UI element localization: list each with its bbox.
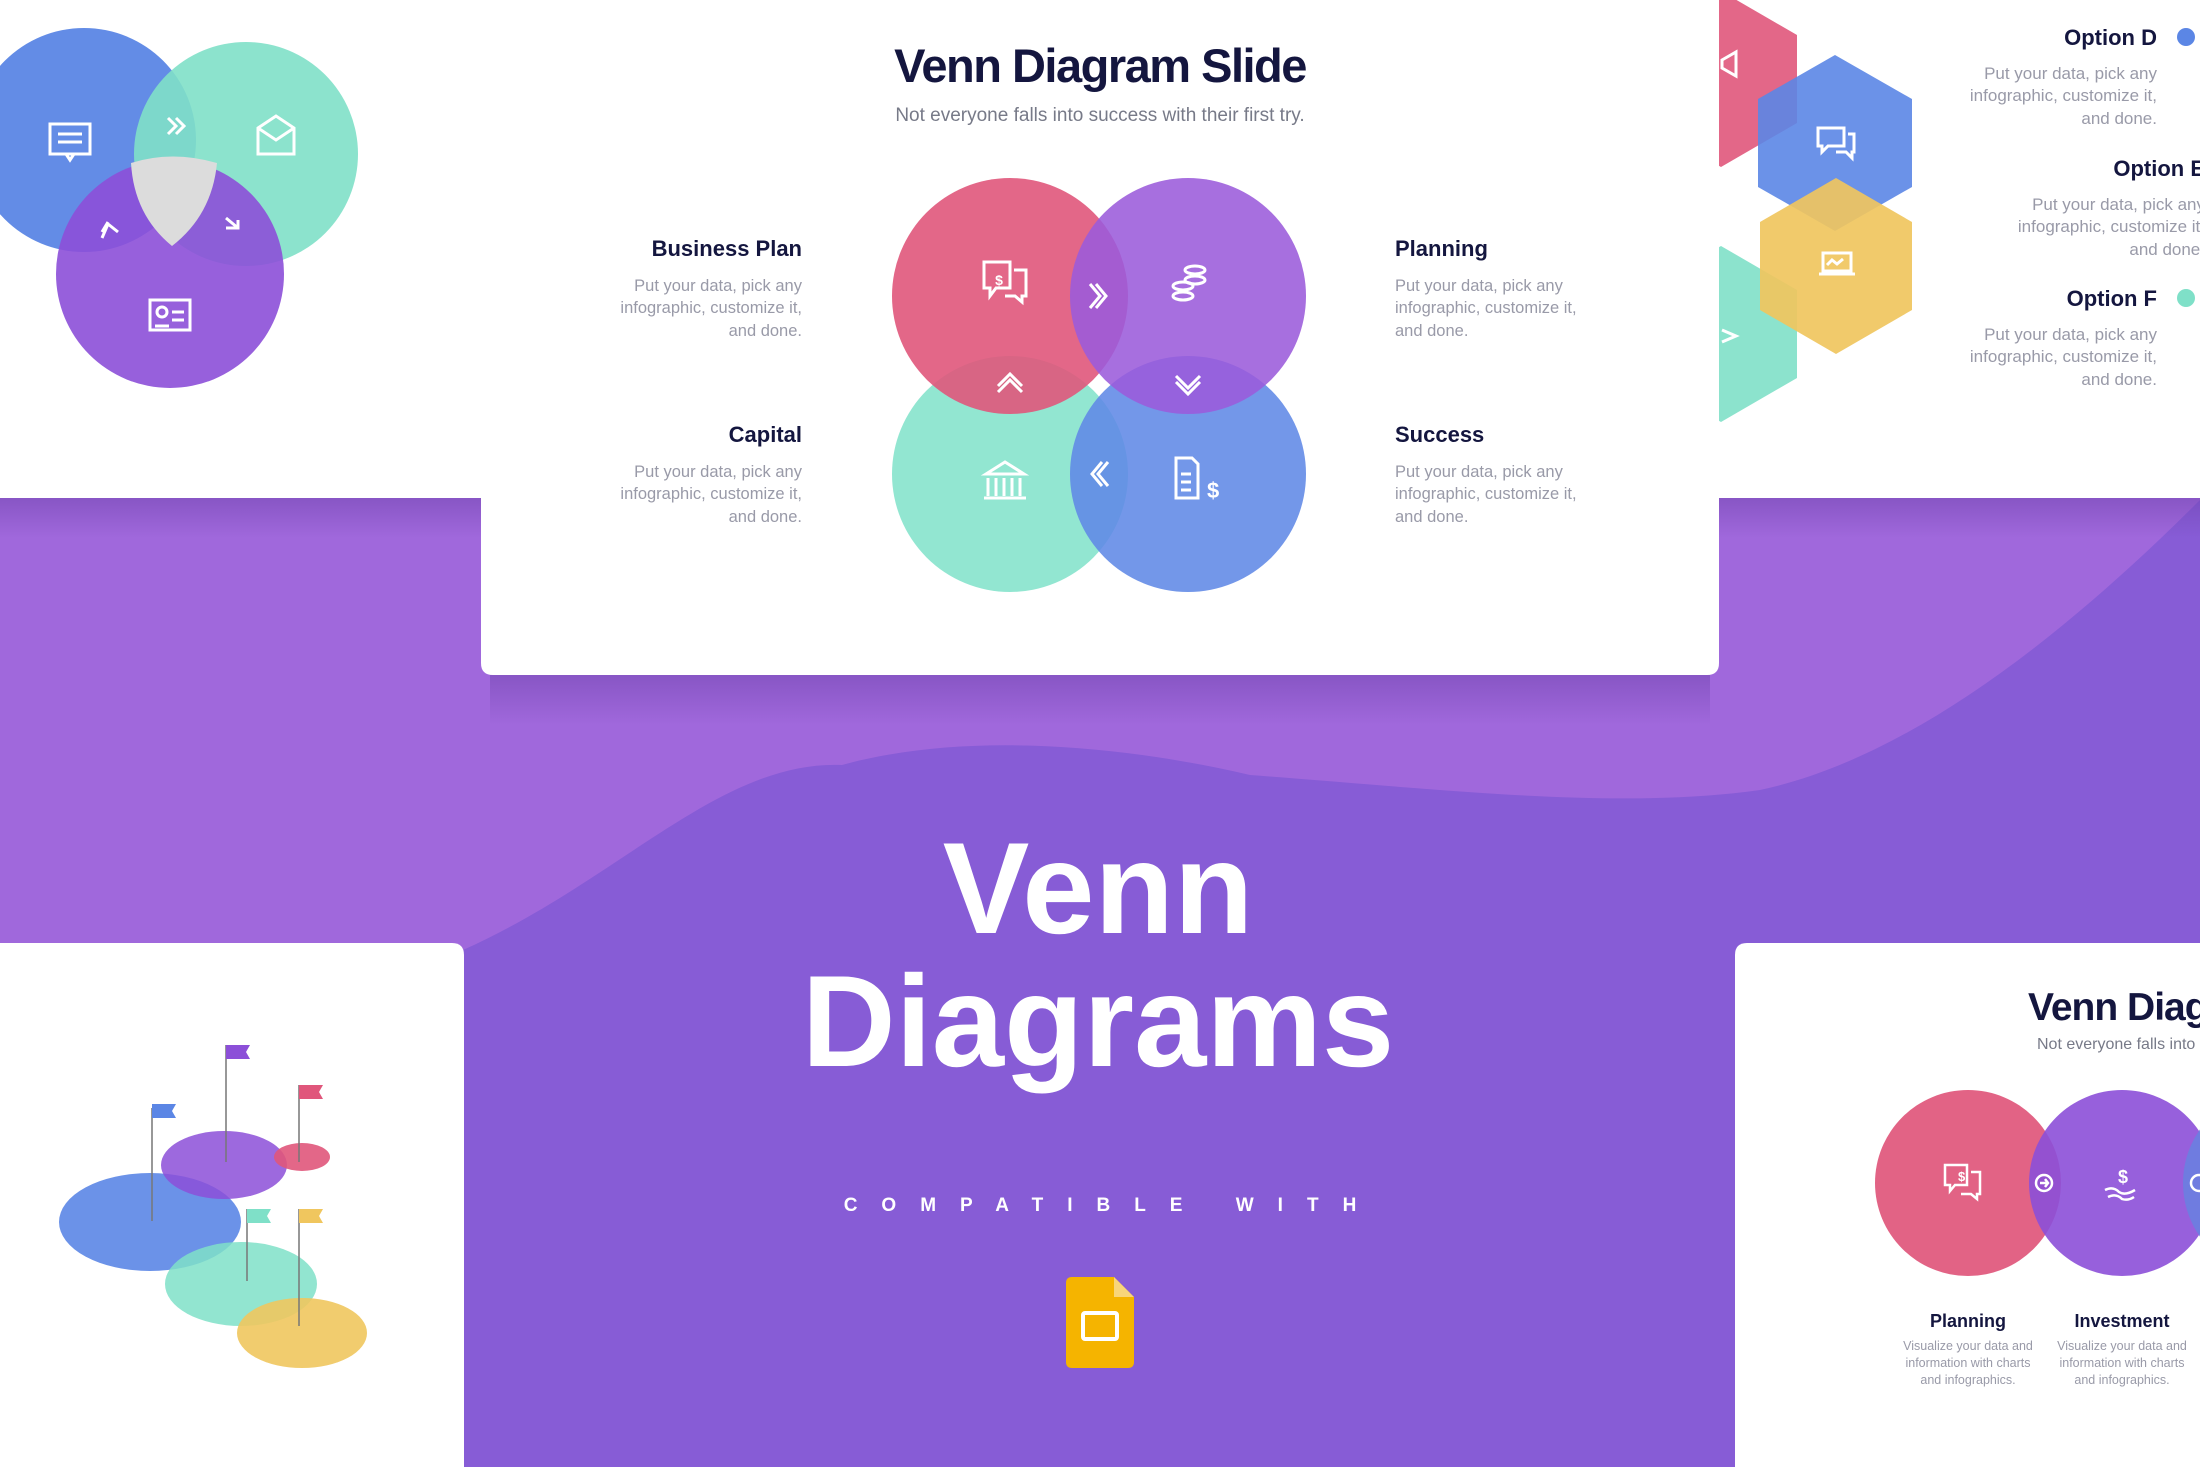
panel: top-right hexagon card: infographic, customize it,: [1970, 347, 2157, 366]
panel: bottom-right venn card: information with charts: [1905, 1356, 2031, 1370]
panel: bottom-right venn card: [1735, 943, 2200, 1467]
panel: center venn diagram slide: infographic, customize it,: [620, 485, 802, 503]
icon: google slides: [1066, 1277, 1134, 1368]
panel: center venn diagram slide: infographic, customize it,: [1395, 299, 1577, 317]
labels: Success: [1395, 422, 1484, 447]
panel: center venn diagram slide: Put your data, pick any: [634, 463, 803, 481]
panel: top-right hexagon card: Put your data, pick any: [2032, 195, 2200, 214]
main title: [802, 815, 1394, 1094]
panel: bottom-right venn card: Visualize your data and: [1903, 1339, 2033, 1353]
panel: center venn diagram slide: and done.: [1395, 508, 1468, 526]
panel: bottom-right venn card: $: [1958, 1169, 1966, 1184]
panel: top-right hexagon card: Put your data, pick any: [1984, 325, 2157, 344]
panel: center venn diagram slide: Put your data, pick any: [1395, 463, 1564, 481]
panel: bottom-right venn card: Planning: [1930, 1311, 2006, 1331]
subtitle: Not everyone falls into success with their first try.: [895, 105, 1305, 126]
panel: center venn diagram slide: infographic, customize it,: [1395, 485, 1577, 503]
panel: top-right hexagon card: Option D: [2064, 25, 2157, 50]
panel: bottom-left flags card: [0, 943, 464, 1467]
icons: [984, 262, 1205, 498]
venn circles: [892, 178, 1306, 592]
labels: [652, 236, 1488, 447]
panel: top-left venn card: [0, 0, 490, 498]
panel: bottom-right venn card: and infographics.: [2074, 1373, 2170, 1387]
labels: Capital: [729, 422, 802, 447]
panel: center venn diagram slide: and done.: [729, 322, 802, 340]
panel: top-right hexagon card: and done.: [2081, 109, 2157, 128]
title: Venn Diagram Slide: [894, 39, 1306, 92]
labels: Business Plan: [652, 236, 802, 261]
panel: bottom-right venn card: Investment: [2074, 1311, 2170, 1331]
panel: center venn diagram slide: $: [1207, 478, 1219, 503]
main title: Venn: [943, 815, 1253, 961]
panel: bottom-right venn card: and infographics.: [1920, 1373, 2016, 1387]
panel: bottom-right venn card: information with charts: [2059, 1356, 2185, 1370]
panel: bottom-right venn card: Visualize your data and: [2057, 1339, 2187, 1353]
panel: center venn diagram slide: infographic, customize it,: [620, 299, 802, 317]
panel: center venn diagram slide: Put your data, pick any: [1395, 277, 1564, 295]
panel: center venn diagram slide: [481, 0, 1719, 675]
panel: bottom-right venn card: $: [2118, 1167, 2128, 1187]
compatible with: COMPATIBLE WITH: [844, 1195, 1380, 1216]
panel: top-right hexagon card: infographic, customize it,: [1970, 86, 2157, 105]
panel: top-right hexagon card: Put your data, pick any: [1984, 64, 2157, 83]
panel: top-right hexagon card: infographic, customize it,: [2018, 217, 2200, 236]
main title: Diagrams: [802, 948, 1394, 1094]
panel: top-right hexagon card: and done.: [2081, 370, 2157, 389]
panel: center venn diagram slide: and done.: [729, 508, 802, 526]
panel: center venn diagram slide: Put your data, pick any: [634, 277, 803, 295]
panel: top-right hexagon card: [1645, 0, 2200, 498]
labels: Planning: [1395, 236, 1488, 261]
panel: center venn diagram slide: and done.: [1395, 322, 1468, 340]
panel: top-right hexagon card: Option F: [2067, 286, 2157, 311]
panel: center venn diagram slide: $: [995, 272, 1003, 288]
